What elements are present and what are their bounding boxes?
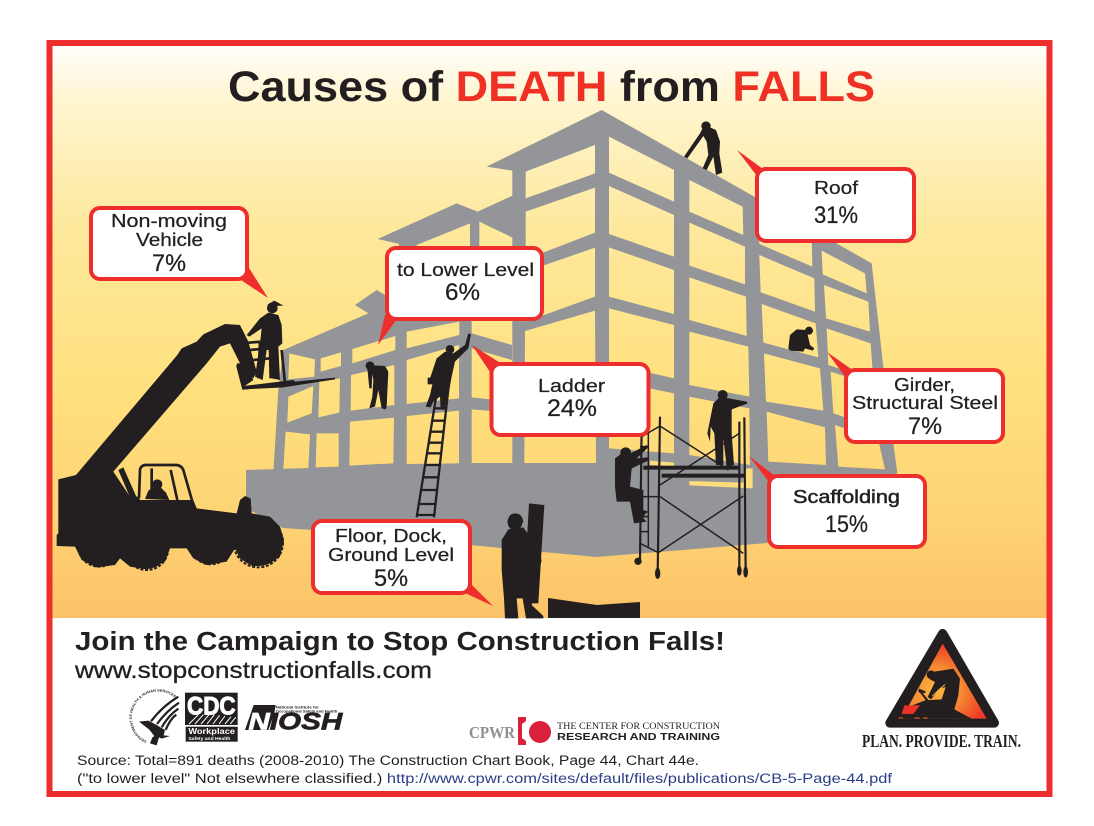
cab driver [145, 479, 169, 500]
callout: roof [737, 150, 914, 241]
callout: roof: Roof [814, 177, 859, 198]
worker on roof [684, 121, 814, 352]
callout: scaffolding: Scaffolding [793, 486, 900, 507]
logo: CDC workplace safety and health: CDC [187, 693, 236, 721]
callout: girder, structural steel: 7% [908, 413, 942, 440]
logo: HHS eagle seal: DEPARTMENT OF HEALTH & HUMAN SERVICES · USA [129, 689, 176, 743]
callout: girder, structural steel [827, 352, 1003, 442]
logo: CPWR center for construction research and training: THE CENTER FOR CONSTRUCTION [557, 722, 720, 732]
callout: ladder [472, 345, 648, 435]
worker climbing scaffold [615, 445, 648, 523]
callout: floor, dock, ground level: Ground Level [328, 544, 454, 565]
foreground worker carrying board [502, 503, 544, 618]
callout: floor, dock, ground level: Floor, Dock, [335, 525, 447, 546]
callout: ladder: 24% [547, 395, 597, 422]
callout: to lower level: to Lower Level [397, 259, 534, 280]
logo: NIOSH: NIOSH [248, 708, 343, 735]
campaign website: www.stopconstructionfalls.com [74, 657, 432, 683]
callout: scaffolding [749, 456, 925, 547]
building: main tower [487, 110, 897, 473]
building: lower small windows [650, 461, 753, 488]
lift platform [237, 342, 285, 388]
callout: non-moving vehicle: 7% [152, 250, 186, 277]
worker crouching on girder [788, 327, 814, 352]
worker on lift [247, 301, 283, 380]
callout: non-moving vehicle: Vehicle [136, 229, 203, 250]
callout: to lower level: 6% [445, 279, 480, 306]
telehandler silhouette [57, 301, 388, 570]
building: plinth [246, 463, 897, 557]
cab frame [139, 465, 193, 505]
background gradient panel [49, 43, 1049, 618]
icon: warning triangle with worker [890, 634, 994, 723]
logo: NIOSH: Occupational Safety and Health [276, 709, 337, 713]
logo: CDC workplace safety and health: Safety and Health [188, 736, 230, 742]
callout: ladder: Ladder [538, 375, 605, 396]
campaign heading: Join the Campaign to Stop Construction Falls! [75, 628, 725, 656]
scaffolding [615, 390, 748, 579]
callout: non-moving vehicle [91, 208, 268, 298]
worker standing on scaffold [707, 390, 748, 467]
callout: girder, structural steel: Structural Steel [852, 392, 998, 413]
callout: floor, dock, ground level [313, 521, 493, 606]
logo: CPWR center for construction research and training: CPWR [469, 723, 516, 742]
logo: CPWR center for construction research and training: RESEARCH AND TRAINING [557, 731, 720, 743]
source note: Source: Total=891 deaths (2008-2010) The Construction Chart Book, Page 44, Chart 44e. [77, 753, 699, 768]
callout: girder, structural steel: Girder, [894, 374, 955, 395]
callout: to lower level [378, 248, 542, 345]
logo: NIOSH: National Institute for [276, 706, 320, 710]
callout: roof: 31% [814, 202, 858, 229]
logo: HHS eagle seal [129, 689, 180, 746]
callout: non-moving vehicle: Non-moving [111, 210, 227, 231]
building: middle tier roof [378, 195, 514, 252]
title: Causes of DEATH from FALLS [228, 63, 875, 111]
callout: scaffolding: 15% [825, 511, 868, 538]
slab on ground [548, 598, 640, 618]
tagline: plan provide train: PLAN. PROVIDE. TRAIN. [862, 731, 1021, 751]
logo: CDC workplace safety and health [185, 693, 238, 742]
source note with link: ("to lower level" Not elsewhere classified.) http://www.cpwr.com/sites/default/files/publications/CB-5-Page-44.pdf [77, 771, 892, 786]
logo: CDC workplace safety and health: Workplace [188, 727, 236, 736]
building: lower left wing [273, 290, 512, 473]
ladder and ladder worker [417, 333, 471, 517]
callout: floor, dock, ground level: 5% [374, 565, 408, 592]
bent-over worker [366, 361, 388, 409]
logo: CPWR center for construction research and training [469, 717, 720, 745]
